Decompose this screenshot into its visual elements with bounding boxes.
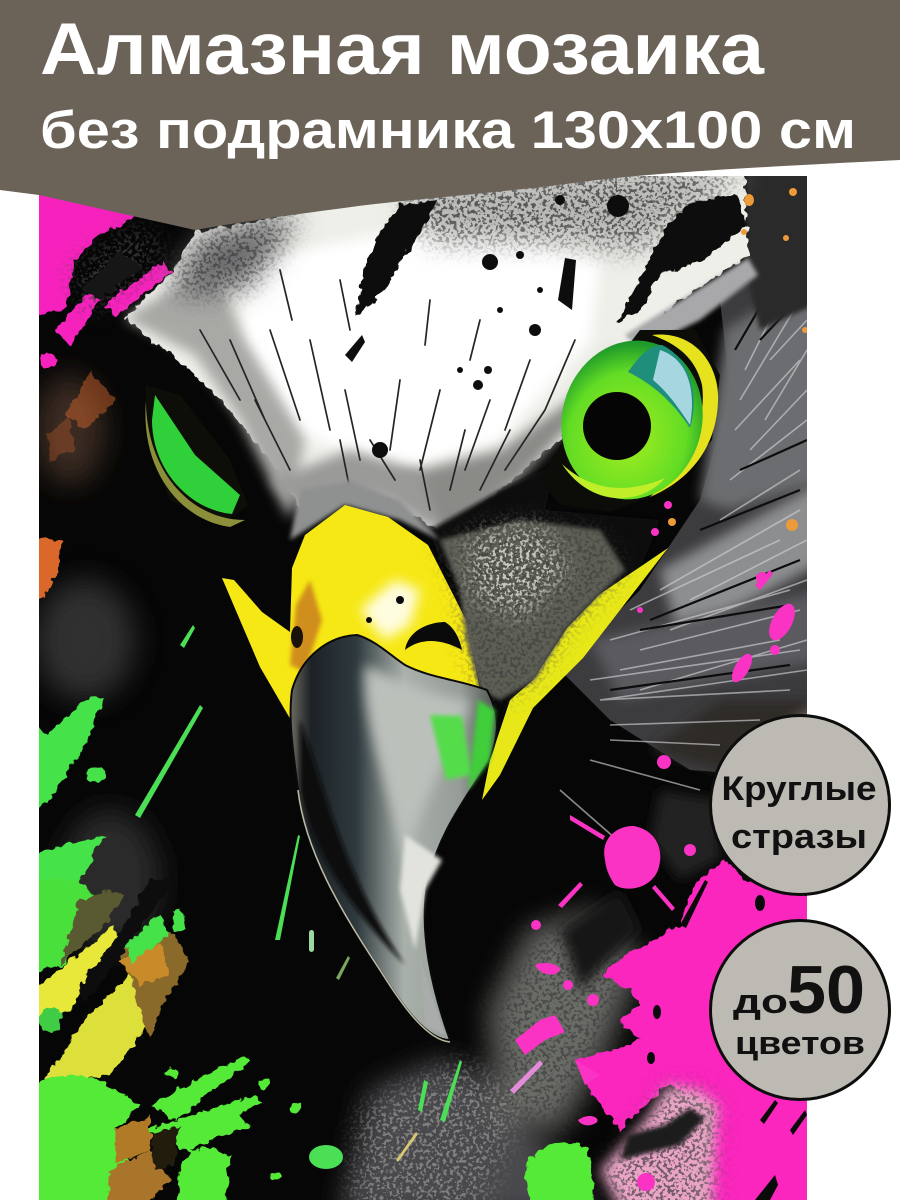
- background: dark smoke: [35, 375, 720, 1200]
- splash: yellow and brown left: [39, 878, 189, 1080]
- title: Алмазная мозаика: [40, 9, 766, 90]
- feathers: right gray: [560, 282, 807, 836]
- right eye: [550, 330, 720, 500]
- dark feathers: brow over cere: [430, 473, 537, 538]
- feathers: white forehead: [125, 170, 758, 535]
- left eye: [145, 385, 248, 527]
- badge: up to 50 colours: 50: [787, 952, 865, 1028]
- black marks on magenta: [647, 880, 807, 1200]
- header banner: [0, 0, 900, 230]
- orange flecks: [668, 188, 808, 531]
- badge: round rhinestones: [710, 716, 890, 894]
- beak: gray hook: [291, 635, 497, 1042]
- poster artwork: eagle: [15, 170, 825, 1200]
- magenta splats: [510, 501, 800, 1125]
- black ink marks on forehead: [345, 195, 748, 458]
- feather tufts above cere: [290, 480, 440, 540]
- splash: green left: [39, 696, 106, 882]
- green thin streaks: [135, 625, 462, 1169]
- splash: magenta bottom right: [575, 860, 825, 1200]
- dark top right patch: [744, 176, 807, 332]
- subtitle: без подрамника 130х100 см: [40, 101, 856, 160]
- badge: round rhinestones: Круглые: [722, 770, 876, 808]
- splash: green bottom centre: [525, 1144, 595, 1200]
- badge: round rhinestones: стразы: [731, 818, 867, 856]
- beak: yellow cere: [222, 505, 668, 800]
- splash: orange left: [39, 370, 116, 599]
- splash: magenta top left: [39, 195, 174, 369]
- badge: up to 50 colours: [710, 920, 890, 1100]
- splash: green bottom left: [15, 1055, 302, 1200]
- speckled pink and white patch: [600, 1085, 718, 1200]
- badge: up to 50 colours: цветов: [735, 1025, 865, 1061]
- badge: up to 50 colours: до: [733, 983, 788, 1021]
